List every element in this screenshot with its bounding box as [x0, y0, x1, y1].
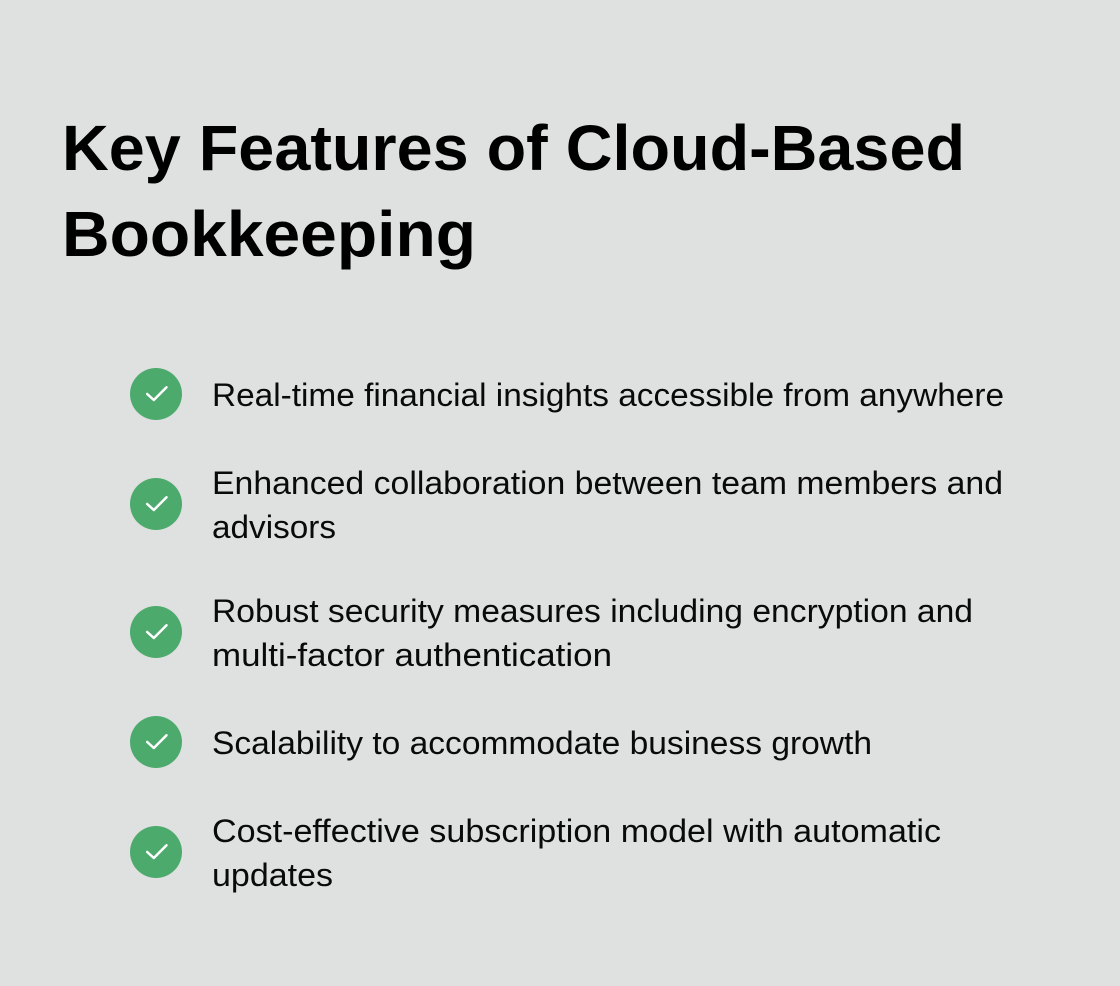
feature 3: multi-factor authentication: [212, 637, 612, 673]
title: Key Features of Cloud-Based: [62, 112, 965, 184]
feature 2: [130, 465, 1003, 545]
title: Bookkeeping: [62, 198, 476, 270]
feature 4: Scalability to accommodate business growth: [212, 725, 872, 761]
feature list: [130, 368, 1004, 893]
feature 3: [130, 593, 973, 673]
feature 4: [130, 716, 872, 768]
feature 3: Robust security measures including encryption and: [212, 593, 973, 629]
title: [62, 112, 965, 270]
feature 5: Cost-effective subscription model with automatic: [212, 813, 941, 849]
feature 2: advisors: [212, 509, 336, 545]
feature 1: Real-time financial insights accessible from anywhere: [212, 377, 1004, 413]
feature 2: Enhanced collaboration between team members and: [212, 465, 1003, 501]
feature 1: [130, 368, 1004, 420]
feature 5: updates: [212, 857, 333, 893]
feature 5: [130, 813, 941, 893]
